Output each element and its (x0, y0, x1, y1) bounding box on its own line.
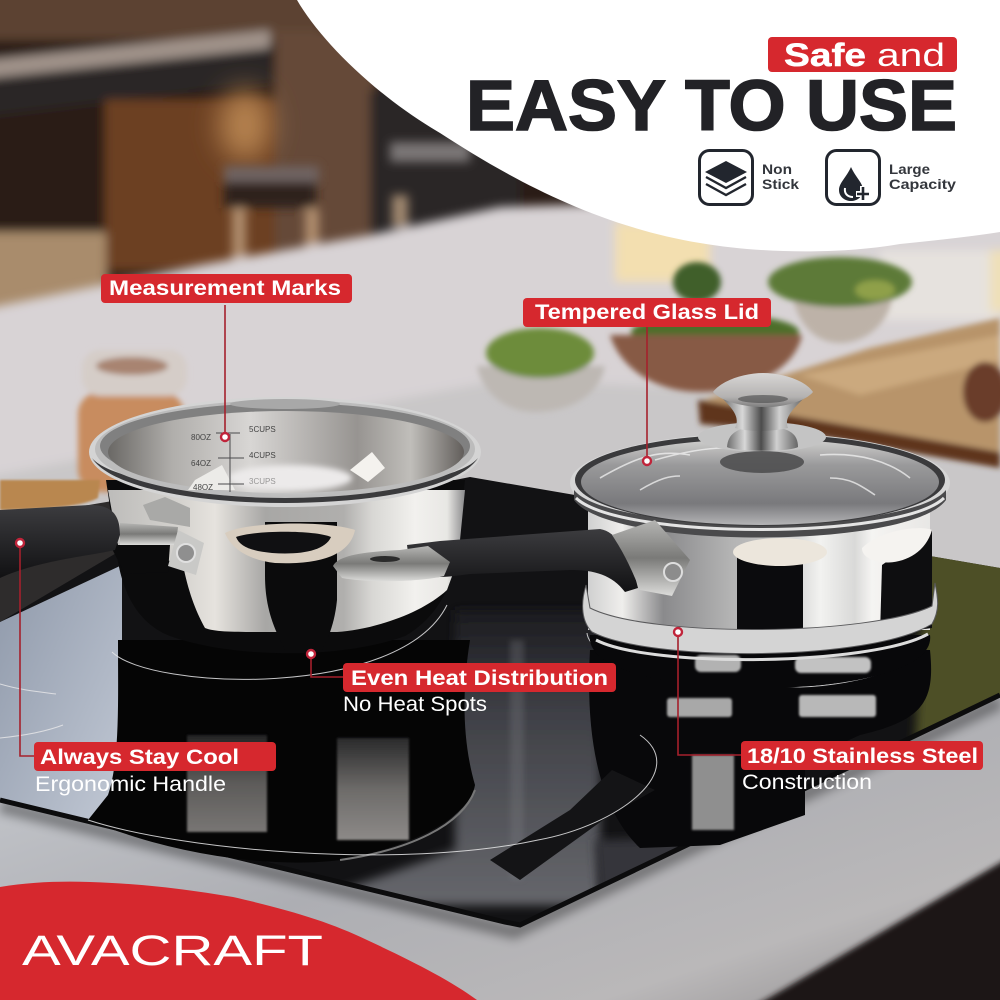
left saucepan with measurement marks: 64OZ (191, 459, 211, 468)
label: non stick: Stick (762, 177, 800, 192)
left handle with bolt bracket (0, 497, 204, 578)
jar (78, 392, 184, 492)
knob reflection (720, 451, 804, 473)
beige reflection blob (225, 524, 355, 563)
left saucepan with measurement marks: 3CUPS (249, 477, 276, 486)
badge: Safe and (768, 37, 957, 73)
right lid with glass and knob (570, 373, 950, 538)
label: non stick (762, 162, 800, 192)
icon: large capacity drop (826, 150, 880, 204)
dark reflection band (265, 522, 337, 650)
callout: stainless steel: 18/10 Stainless Steel (747, 745, 978, 768)
label: large capacity: Large (889, 162, 931, 177)
red logo swoosh (0, 882, 477, 1000)
long handle between saucepans (333, 520, 690, 596)
salad bowl large (631, 314, 799, 350)
icon: non stick layers (700, 150, 752, 204)
background: bowls, board and herbs (0, 257, 1000, 625)
logo: AVACRAFT: AVACRAFT (22, 927, 323, 975)
label: non stick: Non (762, 162, 792, 177)
badge: Safe and: and (877, 37, 945, 73)
badge: Safe and: Safe (784, 37, 866, 73)
left saucepan with measurement marks: 4CUPS (249, 451, 276, 460)
counter front (0, 670, 1000, 1000)
callout: even heat distribution (307, 650, 616, 716)
induction cooktop (0, 477, 1000, 932)
callout: stainless steel: Construction (742, 771, 872, 794)
steam and highlights (228, 465, 352, 491)
left saucepan with measurement marks: 5CUPS (249, 425, 276, 434)
label: large capacity: Capacity (889, 177, 957, 192)
dark body bands (737, 555, 803, 633)
lower dark reflection (590, 635, 930, 688)
callout: always stay cool (16, 539, 276, 796)
left saucepan with measurement marks: 48OZ (193, 483, 213, 492)
steamer ring (583, 583, 938, 654)
silver body (108, 490, 465, 632)
salad bowl small (477, 366, 605, 412)
herb bowl back (793, 300, 892, 343)
knob dome (713, 373, 813, 407)
left saucepan with measurement marks (89, 397, 481, 653)
burner rings (0, 605, 920, 855)
reflection of left saucepan (88, 640, 475, 863)
wood board (698, 318, 1000, 452)
callout: measurement marks (101, 274, 352, 441)
callout: even heat distribution: Even Heat Distribution (351, 667, 608, 690)
reflected handle (490, 770, 655, 880)
lid disk (698, 422, 826, 452)
left mat and gold bowl (0, 498, 130, 625)
dark front corner (748, 857, 1000, 1000)
pan body (106, 480, 465, 653)
callout: tempered glass lid: Tempered Glass Lid (535, 301, 759, 324)
callout: even heat distribution: No Heat Spots (343, 693, 487, 716)
reflection oval (733, 538, 827, 566)
left saucepan with measurement marks: 80OZ (191, 433, 211, 442)
white header swoosh (297, 0, 1000, 251)
callout: measurement marks: Measurement Marks (109, 277, 341, 300)
knob base and neck (727, 427, 798, 451)
right saucepan body and steamer ring (583, 505, 938, 688)
callout: always stay cool: Always Stay Cool (40, 746, 239, 769)
title: EASY TO USE (466, 67, 957, 146)
rim (89, 397, 481, 507)
measurement scale (216, 433, 244, 492)
callout: always stay cool: Ergonomic Handle (35, 773, 226, 796)
callout: stainless steel (674, 628, 983, 794)
callout: tempered glass lid (523, 298, 771, 465)
reflection of right saucepan (490, 650, 931, 880)
label: large capacity (889, 162, 957, 192)
